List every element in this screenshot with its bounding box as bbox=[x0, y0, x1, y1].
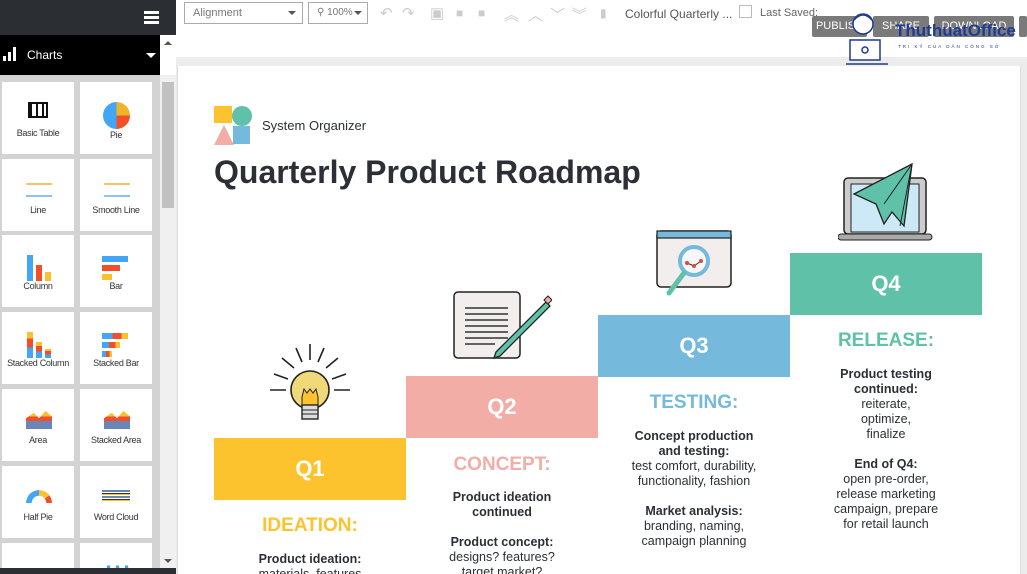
sidebar chart tiles bbox=[0, 75, 160, 568]
text: concept bbox=[449, 490, 555, 574]
text: testing: branding, naming, bbox=[644, 519, 744, 533]
icon: browser with magnifier bbox=[656, 230, 732, 296]
heading: concept: CONCEPT: bbox=[453, 454, 551, 475]
toolbar: ↶ bbox=[380, 5, 393, 22]
watermark logo: TRI KỶ CỦA DÂN CÔNG SỞ bbox=[898, 44, 1001, 49]
heading: release: RELEASE: bbox=[838, 330, 934, 351]
text: release bbox=[834, 367, 938, 531]
toolbar: ▮ bbox=[600, 6, 607, 20]
step: Q4: Q4 bbox=[871, 271, 901, 296]
charts bar bbox=[0, 35, 160, 75]
title: Quarterly Product Roadmap bbox=[214, 154, 641, 190]
text: testing: and testing: bbox=[659, 444, 729, 458]
sidebar chart tiles: Smooth Line bbox=[92, 205, 140, 215]
sidebar header bbox=[0, 0, 176, 35]
toolbar: ⚲ 100% bbox=[317, 7, 353, 18]
toolbar: ■ bbox=[456, 6, 463, 20]
sidebar chart tiles: Bar bbox=[109, 281, 123, 291]
canvas bbox=[177, 66, 1021, 574]
buttons: PUBLISH bbox=[816, 20, 863, 32]
icon: laptop with paper plane bbox=[838, 162, 932, 240]
text: ideation: Product ideation: bbox=[259, 552, 361, 566]
text: testing: functionality, fashion bbox=[638, 474, 750, 488]
icon: menu bbox=[144, 11, 159, 24]
toolbar: ﹀ bbox=[550, 7, 565, 24]
brand name: System Organizer bbox=[262, 118, 366, 133]
sidebar chart tiles: Basic Table bbox=[17, 128, 59, 138]
text: testing bbox=[632, 429, 756, 548]
text: release: for retail launch bbox=[843, 517, 929, 531]
text: release: Product testing bbox=[840, 367, 932, 381]
toolbar: ︽ bbox=[504, 7, 519, 24]
text: release: optimize, bbox=[861, 412, 911, 426]
heading: ideation: IDEATION: bbox=[262, 515, 358, 536]
sidebar chart tiles: Area bbox=[29, 435, 47, 445]
sidebar scrollbar bbox=[160, 75, 176, 568]
heading: testing: TESTING: bbox=[650, 392, 738, 413]
text: SHARE bbox=[882, 20, 920, 32]
text: release: reiterate, bbox=[861, 397, 911, 411]
sidebar chart tiles: Stacked Bar bbox=[93, 358, 139, 368]
toolbar: ︾ bbox=[572, 7, 587, 24]
text: ideation bbox=[259, 552, 361, 574]
sidebar chart tiles: Stacked Column bbox=[7, 358, 69, 368]
toolbar: ↷ bbox=[402, 5, 415, 22]
sidebar chart tiles: Pie bbox=[110, 130, 122, 140]
toolbar: Alignment bbox=[193, 7, 242, 19]
watermark logo: ThuthuatOffice bbox=[895, 21, 1016, 40]
logo bbox=[214, 106, 252, 145]
text: release: campaign, prepare bbox=[834, 502, 938, 516]
buttons bbox=[812, 16, 867, 37]
text: testing: campaign planning bbox=[642, 534, 746, 548]
sidebar chart tiles: Column bbox=[23, 281, 53, 291]
text: release: release marketing bbox=[836, 487, 936, 501]
step: Q3: Q3 bbox=[679, 333, 709, 358]
charts bar: Charts bbox=[27, 48, 62, 62]
text: DOWNLOAD bbox=[942, 20, 1006, 32]
step: Q2 bbox=[406, 376, 598, 438]
step: Q2: Q2 bbox=[487, 394, 517, 419]
toolbar: ■ bbox=[478, 6, 485, 20]
text: concept: continued bbox=[472, 505, 532, 519]
toolbar: ▣ bbox=[430, 5, 444, 22]
text: release: open pre-order, bbox=[843, 472, 929, 486]
step: Q1: Q1 bbox=[295, 456, 325, 481]
text: release: finalize bbox=[867, 427, 905, 441]
sidebar chart tiles: Word Cloud bbox=[94, 512, 138, 522]
step: Q4 bbox=[790, 253, 982, 315]
text: testing: Concept production bbox=[635, 429, 753, 443]
text: testing: Market analysis: bbox=[645, 504, 743, 518]
text: release: End of Q4: bbox=[854, 457, 918, 471]
watermark logo bbox=[846, 13, 1016, 65]
text: concept: Product ideation bbox=[453, 490, 551, 504]
toolbar: ︿ bbox=[528, 7, 543, 24]
step: Q1 bbox=[214, 438, 406, 500]
text: concept: Product concept: bbox=[451, 535, 553, 549]
toolbar bbox=[176, 0, 1027, 57]
toolbar: Colorful Quarterly ... bbox=[625, 7, 732, 21]
text: release: continued: bbox=[854, 382, 918, 396]
text: testing: test comfort, durability, bbox=[632, 459, 756, 473]
sidebar chart tiles: Line bbox=[30, 205, 46, 215]
step: Q3 bbox=[598, 315, 790, 377]
icon: document with pencil bbox=[453, 291, 552, 359]
sidebar chart tiles: Half Pie bbox=[23, 512, 53, 522]
toolbar: Last Saved: bbox=[760, 7, 818, 19]
icon: light bulb bbox=[270, 344, 350, 420]
text: concept: designs? features? bbox=[449, 550, 555, 564]
sidebar chart tiles: Stacked Area bbox=[91, 435, 141, 445]
